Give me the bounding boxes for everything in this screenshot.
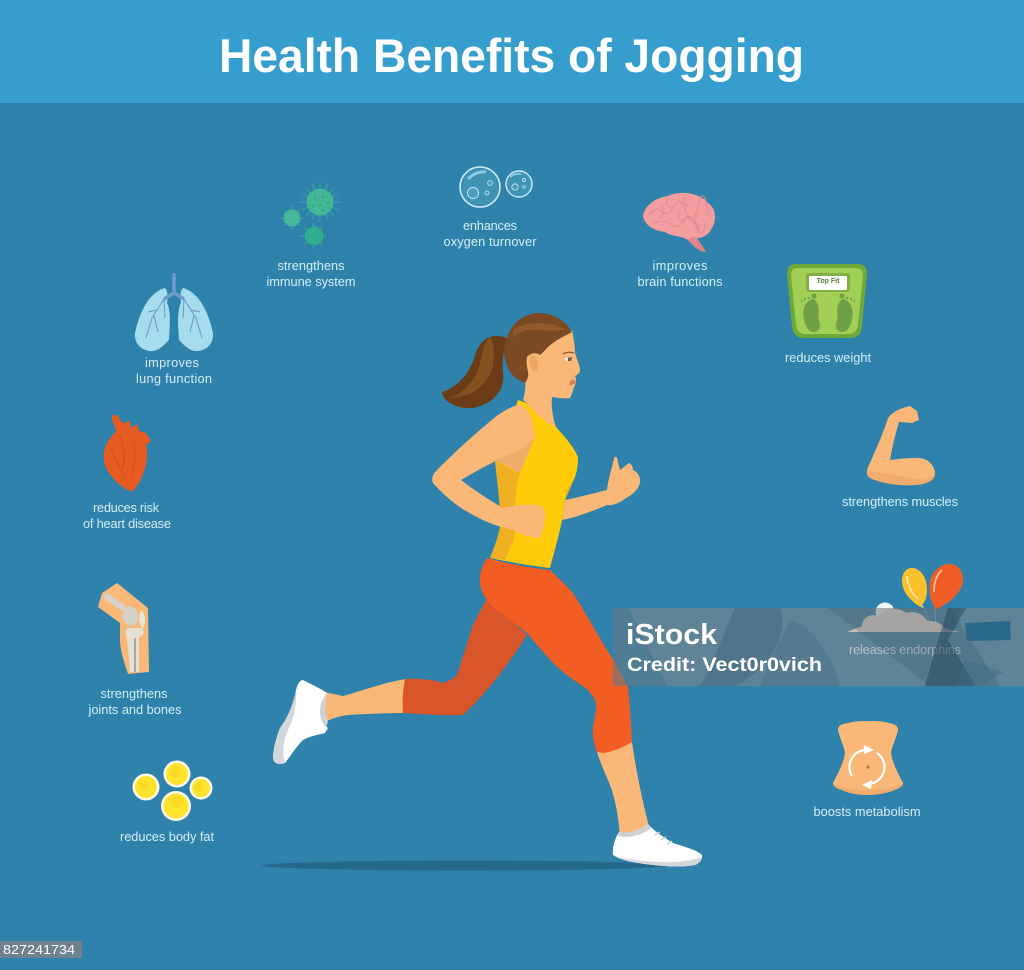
caption: improves <box>145 355 199 370</box>
icon: bubbles <box>460 167 532 207</box>
front calf <box>597 742 650 840</box>
front leg <box>480 558 702 867</box>
ground shadow <box>262 860 670 870</box>
back leg <box>273 598 527 764</box>
title banner <box>0 0 1024 103</box>
caption: of heart disease <box>83 516 171 531</box>
title: Health Benefits of Jogging <box>219 29 804 82</box>
caption: reduces weight <box>785 350 871 365</box>
back arm forearm and fist <box>562 457 640 520</box>
tank top <box>490 400 578 568</box>
caption: joints and bones <box>88 702 182 717</box>
caption: enhances <box>463 218 517 233</box>
benefit: weight <box>785 264 871 365</box>
watermark credit: Credit: Vect0r0vich <box>627 655 822 676</box>
caption: improves <box>652 258 708 273</box>
watermark band <box>613 608 1024 686</box>
tank top side shading <box>490 460 520 560</box>
icon: knee joint <box>98 583 149 674</box>
benefit: lungs <box>135 273 213 386</box>
image id tag: 827241734 <box>3 943 75 957</box>
icon: lungs <box>135 273 213 351</box>
caption: strengthens <box>278 258 344 273</box>
benefit: endorphins <box>847 564 963 657</box>
caption: strengthens muscles <box>842 494 958 509</box>
front shoe <box>613 824 702 867</box>
watermark logo: iStock <box>626 619 718 651</box>
front arm <box>432 405 545 538</box>
icon: bathroom scale: Top Fit <box>817 278 840 285</box>
caption: lung function <box>136 371 212 386</box>
image id tag <box>0 941 82 958</box>
neck and face <box>522 330 580 427</box>
benefit: joints <box>88 583 182 717</box>
caption: oxygen turnover <box>444 234 537 249</box>
benefit: brain <box>638 193 722 289</box>
icon: brain <box>643 193 715 252</box>
icon: heart <box>104 415 151 491</box>
front thigh and shorts <box>480 558 632 753</box>
benefit: metabolism <box>814 721 920 819</box>
benefit: heart <box>83 415 171 531</box>
caption: brain functions <box>638 274 722 289</box>
back shoe <box>273 680 328 764</box>
caption: reduces risk <box>93 500 160 515</box>
benefit: body fat <box>120 760 214 844</box>
hair <box>504 313 572 383</box>
benefit: oxygen <box>444 167 537 249</box>
caption: immune system <box>266 274 356 289</box>
benefit: muscles <box>842 406 958 509</box>
caption: releases endorphins <box>849 642 961 657</box>
back thigh and shorts <box>403 598 527 715</box>
benefit: immune system <box>266 182 356 289</box>
caption: boosts metabolism <box>814 804 920 819</box>
icon: abdomen <box>833 721 903 795</box>
icon: viruses <box>280 182 340 249</box>
caption: reduces body fat <box>120 829 214 844</box>
icon: flexed arm <box>867 406 935 485</box>
caption: strengthens <box>100 686 168 701</box>
jogger figure <box>273 313 702 867</box>
armpit shading <box>495 437 535 473</box>
icon: balloons and cloud <box>847 564 963 632</box>
back calf <box>320 679 407 724</box>
icon: fat cells <box>132 760 212 821</box>
ponytail <box>442 336 508 408</box>
